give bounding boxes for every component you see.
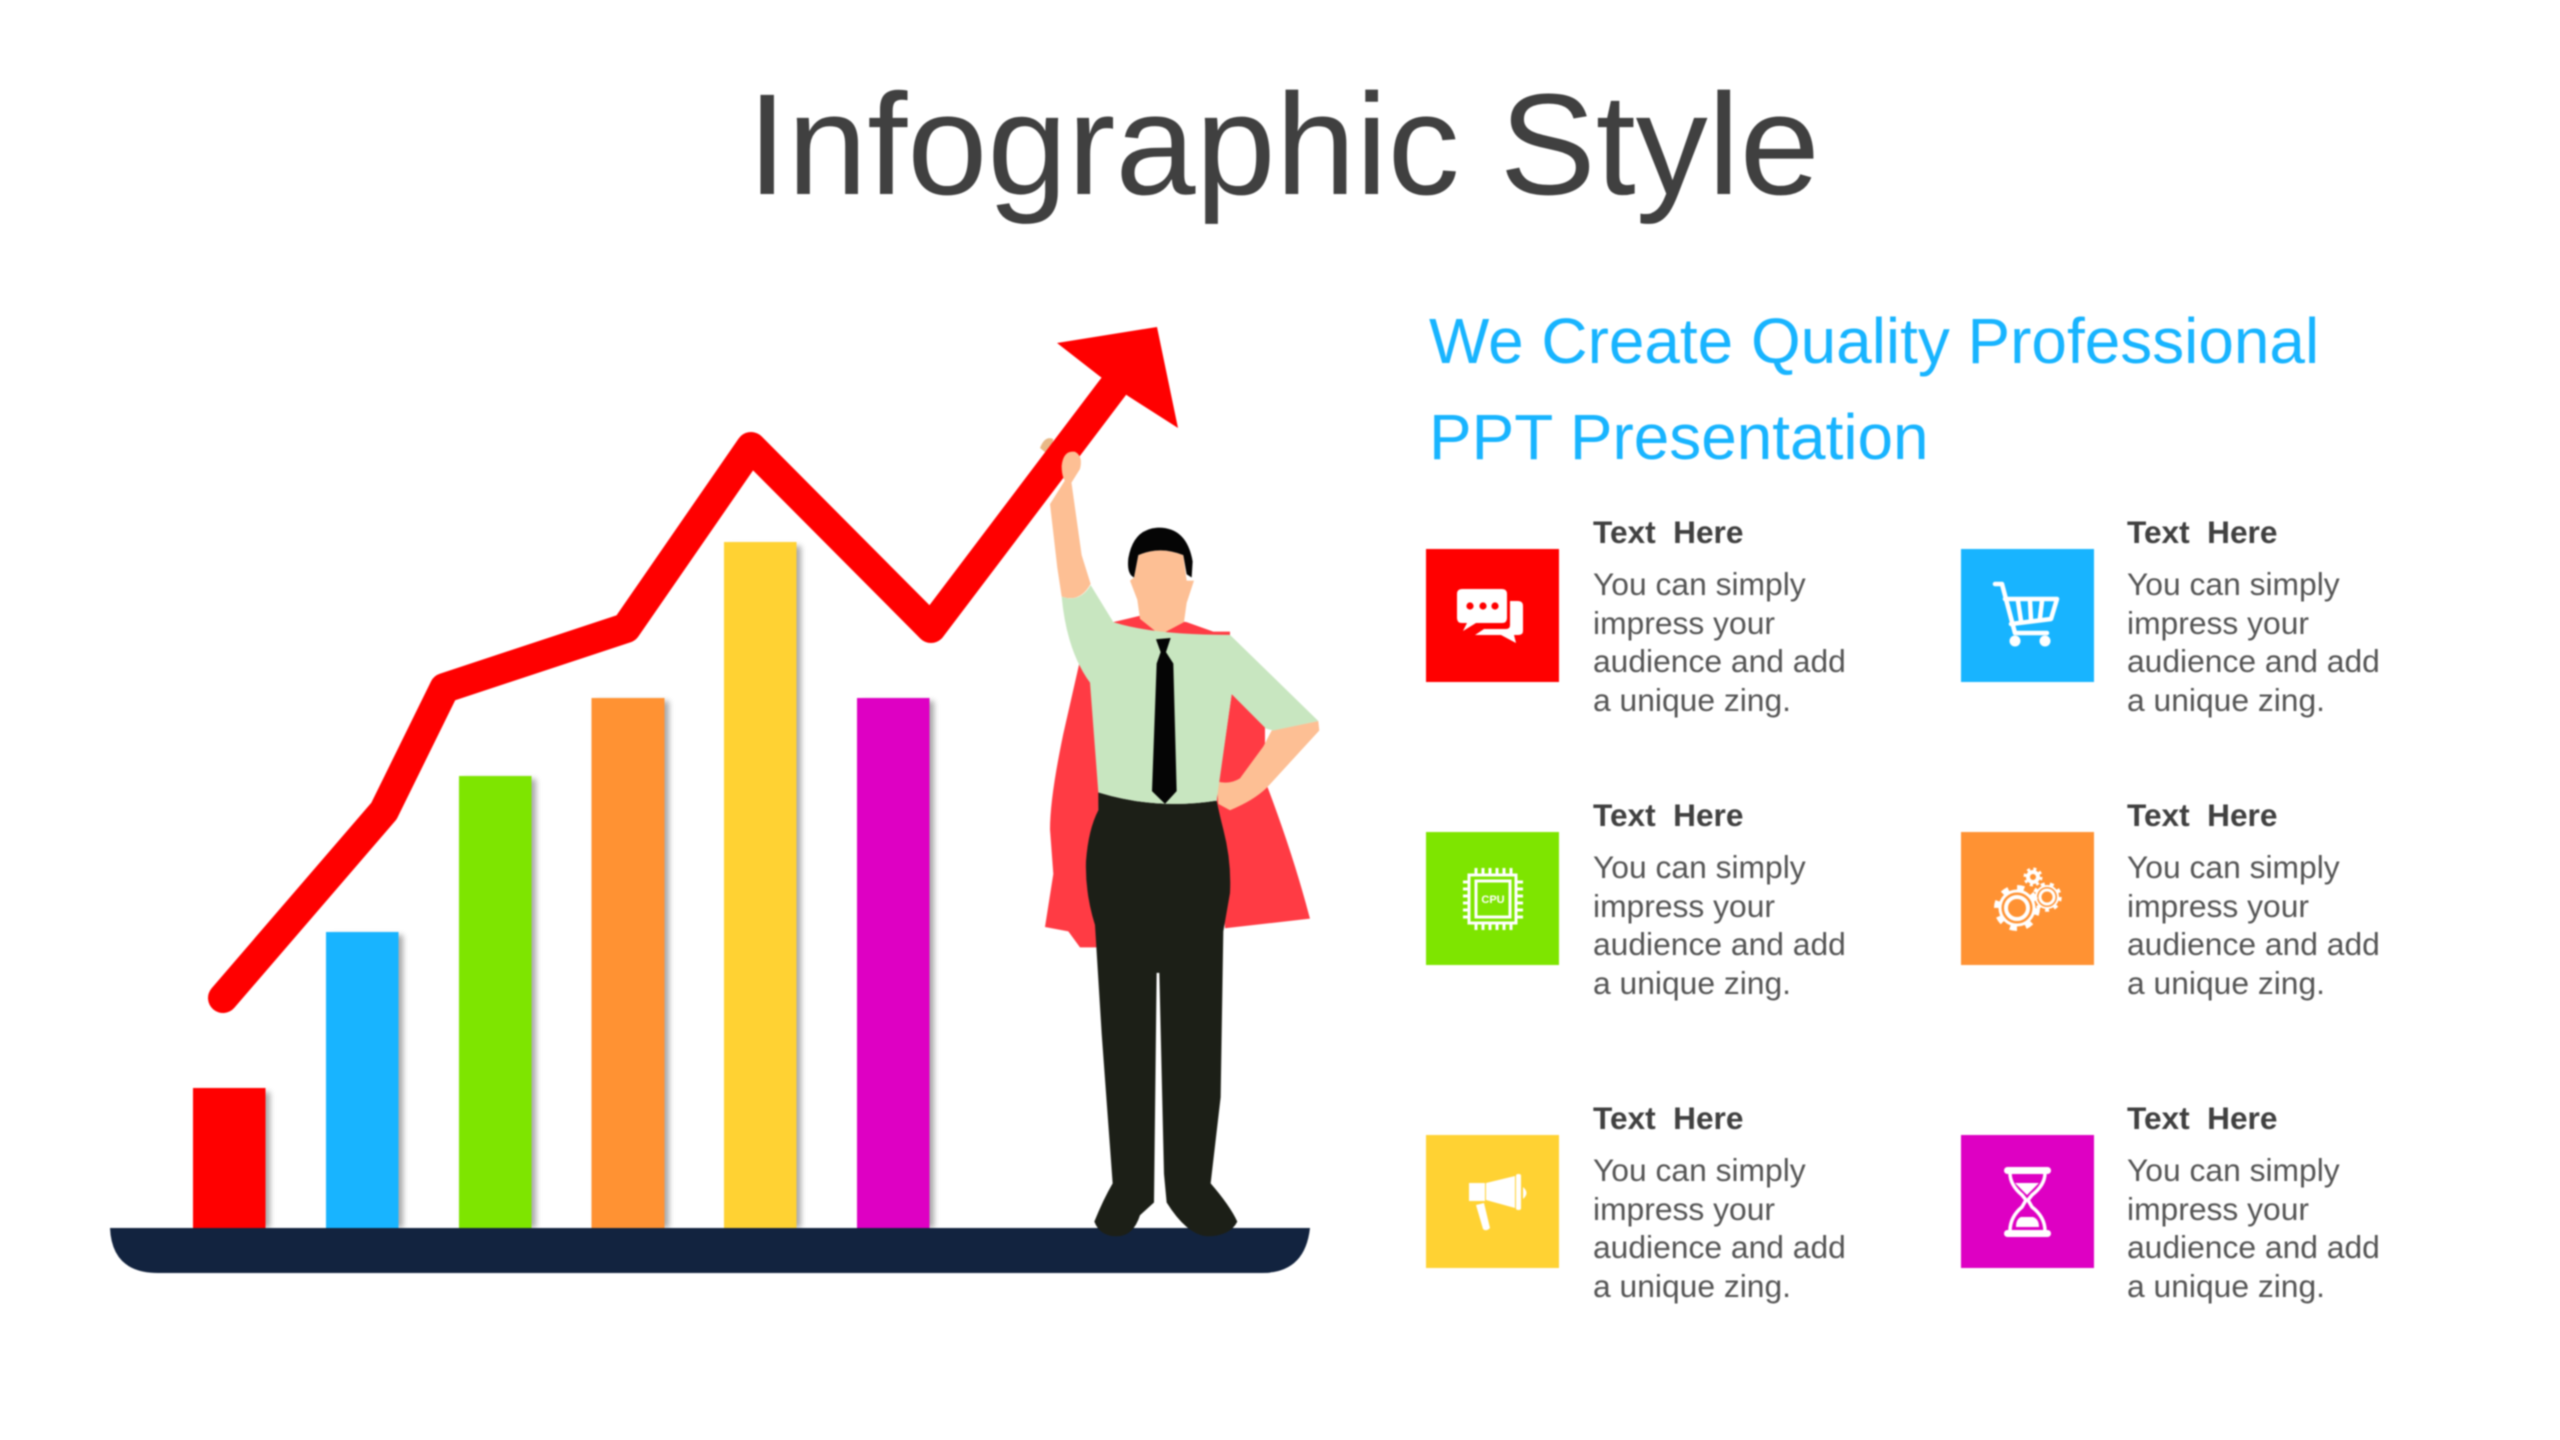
shirt: [1062, 585, 1318, 804]
heading: Text Here: [1593, 797, 1743, 833]
body text: You can simply: [2127, 1152, 2340, 1188]
body text: You can simply: [1593, 566, 1806, 602]
subtitle: We Create Quality Professional: [1429, 305, 2319, 377]
icon: hourglass: [1961, 1135, 2094, 1268]
body text: audience and add: [2127, 926, 2380, 962]
body text: [1593, 566, 1846, 718]
base platform: [110, 1228, 1310, 1273]
bar: orange: [592, 698, 664, 1228]
raised arm: [1050, 472, 1091, 598]
heading: Text Here: [1593, 514, 1743, 550]
title: Infographic Style: [747, 64, 1820, 225]
icon: shopping cart: [1961, 549, 2094, 682]
item: megaphone: [1425, 1100, 1846, 1304]
bar: green: [459, 776, 532, 1228]
bar: magenta: [857, 698, 930, 1228]
icon: cpu chip: CPU: [1481, 894, 1505, 906]
lower arm: [1217, 721, 1319, 810]
bar: yellow: [724, 542, 796, 1228]
body text: audience and add: [1593, 926, 1846, 962]
body text: a unique zing.: [2127, 682, 2325, 718]
body text: You can simply: [2127, 849, 2340, 885]
body text: You can simply: [1593, 849, 1806, 885]
body text: a unique zing.: [1593, 964, 1791, 1000]
hair: [1128, 528, 1193, 577]
front hand gripping the line: [1062, 452, 1081, 485]
bar: blue: [326, 932, 398, 1228]
man with cape: [1040, 438, 1319, 1236]
icon: megaphone: [1426, 1135, 1559, 1268]
arrow head: [1057, 327, 1178, 428]
icon: cpu chip: [1426, 832, 1559, 965]
body text: a unique zing.: [1593, 682, 1791, 718]
body text: [2127, 566, 2380, 718]
body text: a unique zing.: [1593, 1268, 1791, 1304]
item: gears: [1960, 797, 2380, 1002]
tie: [1152, 638, 1177, 804]
body text: a unique zing.: [2127, 964, 2325, 1000]
subtitle: [1428, 305, 2319, 472]
subtitle: PPT Presentation: [1429, 400, 1929, 472]
cape: [1045, 616, 1310, 947]
neck and face: [1130, 550, 1194, 635]
body text: audience and add: [2127, 1229, 2380, 1265]
body text: impress your: [1593, 888, 1775, 924]
trousers and shoes: [1086, 792, 1237, 1236]
body text: You can simply: [1593, 1152, 1806, 1188]
body text: audience and add: [1593, 643, 1846, 679]
item: cart: [1960, 514, 2380, 718]
item: hourglass: [1960, 1100, 2380, 1304]
body text: impress your: [2127, 1190, 2309, 1226]
icon: chat bubbles: [1426, 549, 1559, 682]
body text: [1593, 849, 1846, 1002]
icon: gears: [1961, 832, 2094, 965]
back fingers: [1040, 438, 1053, 456]
bar: red: [193, 1088, 266, 1228]
item: cpu: [1424, 797, 1846, 1002]
item: chat: [1424, 514, 1846, 718]
body text: [2127, 1152, 2380, 1304]
bar shadows: [198, 546, 934, 1228]
body text: audience and add: [2127, 643, 2380, 679]
body text: audience and add: [1593, 1229, 1846, 1265]
body text: [2127, 849, 2380, 1002]
heading: Text Here: [2127, 1100, 2277, 1136]
body text: You can simply: [2127, 566, 2340, 602]
heading: Text Here: [2127, 514, 2277, 550]
heading: Text Here: [2127, 797, 2277, 833]
rising red trend line: [223, 386, 1114, 998]
body text: [1593, 1152, 1846, 1304]
body text: impress your: [2127, 604, 2309, 640]
body text: impress your: [1593, 1190, 1775, 1226]
body text: a unique zing.: [2127, 1268, 2325, 1304]
heading: Text Here: [1593, 1100, 1743, 1136]
body text: impress your: [2127, 888, 2309, 924]
body text: impress your: [1593, 604, 1775, 640]
